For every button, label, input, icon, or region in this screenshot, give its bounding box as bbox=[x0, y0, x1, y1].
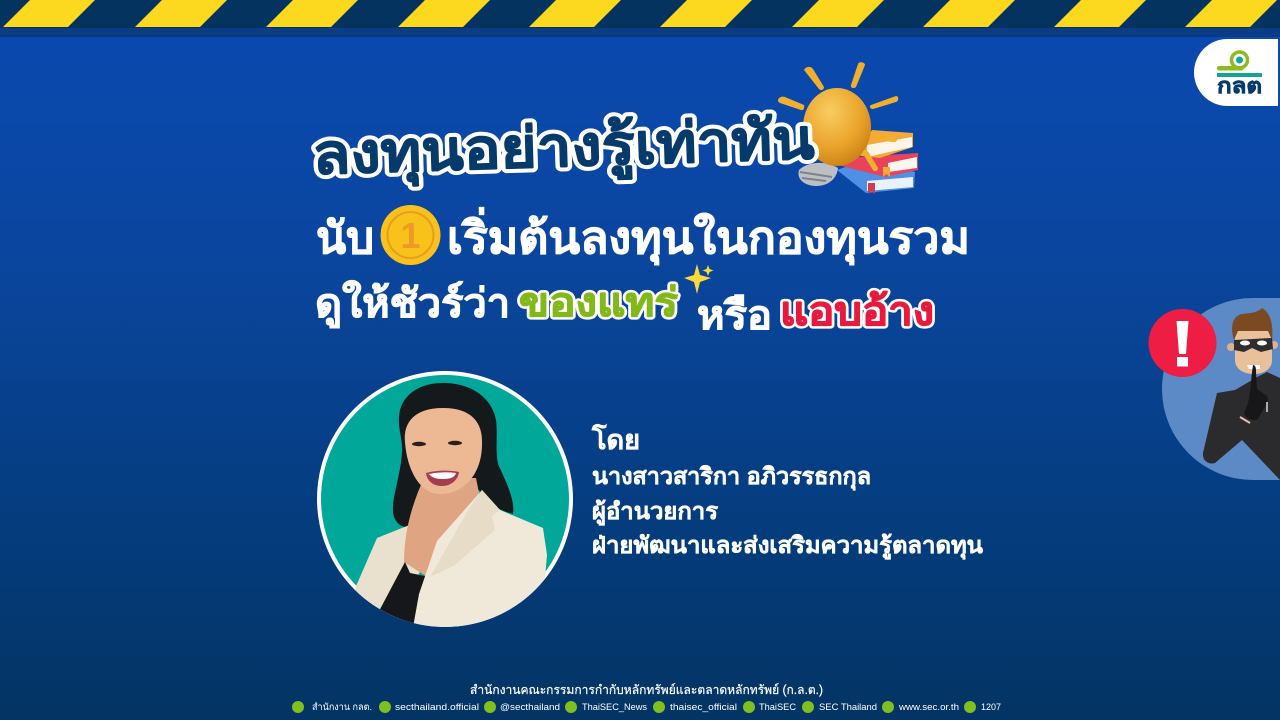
footer contact row: secthailand.official bbox=[395, 702, 479, 713]
subtitle line 2: ดูให้ชัวร์ว่า bbox=[315, 280, 510, 328]
icon: light bulb and books bbox=[778, 62, 918, 194]
by label: โดย bbox=[591, 423, 640, 455]
footer contact row: ThaiSEC bbox=[759, 702, 796, 713]
hazard stripe bar bbox=[0, 0, 1280, 37]
presenter text bbox=[591, 423, 983, 560]
jacket left bbox=[354, 526, 420, 618]
lapel shadow bbox=[430, 490, 500, 577]
cuff bbox=[1240, 417, 1250, 423]
portrait photo bbox=[317, 371, 573, 644]
footer contact row: SEC Thailand bbox=[819, 702, 877, 713]
icon: number one coin: 1 bbox=[400, 215, 421, 256]
subtitle line 2: หรือ bbox=[697, 294, 772, 338]
body bbox=[1203, 372, 1280, 480]
ears bbox=[1227, 343, 1234, 351]
highlight: genuine: ของแทร่ bbox=[519, 281, 679, 325]
title: ลงทุนอย่างรู้เท่าทัน bbox=[312, 107, 815, 190]
warning illustration: thief bbox=[1148, 298, 1280, 480]
footer contact row: www.sec.or.th bbox=[898, 702, 959, 713]
icon: red exclamation badge bbox=[1148, 309, 1216, 377]
highlight: genuine: ของแทร่ bbox=[519, 281, 679, 325]
gloved hand bbox=[1244, 365, 1268, 420]
title: ลงทุนอย่างรู้เท่าทัน bbox=[312, 107, 815, 190]
footer contact row bbox=[292, 701, 1001, 713]
footer contact row: thaisec_official bbox=[670, 702, 737, 713]
footer contact row: ThaiSEC_News bbox=[582, 702, 647, 713]
black top bbox=[380, 562, 426, 624]
footer contact row: @secthailand bbox=[500, 702, 560, 713]
bulb glass bbox=[803, 88, 871, 166]
subtitle line 2 bbox=[315, 264, 934, 338]
footer bbox=[292, 683, 1001, 713]
jacket right bbox=[414, 490, 547, 627]
presenter position: ผู้อำนวยการ bbox=[592, 498, 719, 526]
zipper bbox=[1266, 402, 1268, 412]
highlight: impersonated: แอบอ้าง bbox=[780, 290, 934, 334]
presenter department: ฝ่ายพัฒนาและส่งเสริมความรู้ตลาดทุน bbox=[592, 532, 983, 560]
footer contact row: สำนักงาน กลต. bbox=[312, 702, 372, 713]
footer organisation name: สำนักงานคณะกรรมการกำกับหลักทรัพย์และตลาดหลักทรัพย์ (ก.ล.ต.) bbox=[470, 683, 823, 697]
books bbox=[837, 130, 918, 194]
subtitle line 1: นับ bbox=[316, 214, 374, 263]
subtitle line 1: เริ่มต้นลงทุนในกองทุนรวม bbox=[447, 207, 970, 266]
face bbox=[405, 408, 482, 494]
teeth bbox=[1247, 365, 1260, 369]
bulb socket bbox=[798, 163, 838, 186]
head bbox=[1235, 330, 1272, 374]
logo: SEC Thailand bbox=[1194, 39, 1278, 106]
logo: SEC Thailand: กลต bbox=[1217, 75, 1262, 98]
icon: sparkles bbox=[684, 264, 714, 294]
icon: number one coin bbox=[380, 205, 440, 265]
presenter name: นางสาวสาริกา อภิวรรธกกุล bbox=[592, 463, 871, 491]
hair bbox=[1232, 308, 1272, 340]
light rays bbox=[778, 62, 898, 110]
hair bbox=[393, 383, 513, 527]
mask bbox=[1234, 338, 1273, 352]
subtitle line 1 bbox=[316, 205, 970, 266]
neck and chest bbox=[404, 478, 480, 580]
footer contact row: 1207 bbox=[981, 702, 1001, 713]
highlight: impersonated: แอบอ้าง bbox=[780, 290, 934, 334]
